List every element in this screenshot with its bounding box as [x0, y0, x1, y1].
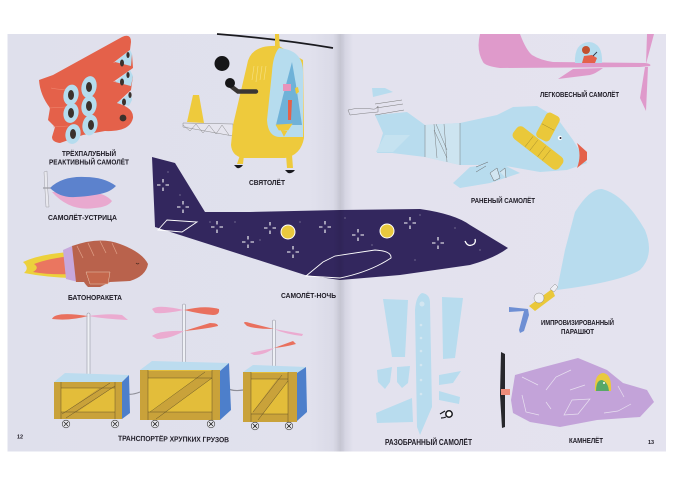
label: improvised parachute: ИМПРОВИЗИРОВАННЫЙ — [541, 318, 614, 327]
lightweight pink plane — [479, 34, 654, 111]
label: oyster plane: САМОЛЁТ-УСТРИЦА — [48, 213, 118, 222]
label: lightweight plane: ЛЕГКОВЕСНЫЙ САМОЛЁТ — [540, 90, 619, 99]
label: improvised parachute: ПАРАШЮТ — [561, 327, 594, 336]
label: helicopter: СВЯТОЛЁТ — [249, 178, 285, 187]
label: wounded plane: РАНЕНЫЙ САМОЛЁТ — [471, 196, 535, 205]
label: three-deck jet plane — [49, 149, 129, 166]
label: disassembled plane: РАЗОБРАННЫЙ САМОЛЁТ — [385, 438, 472, 447]
improvised parachute with figure — [509, 189, 649, 333]
oyster plane — [43, 171, 116, 209]
icon: loose wheel — [440, 411, 452, 418]
baguette rocket — [23, 240, 148, 287]
label: three-deck jet plane: ТРЁХПАЛУБНЫЙ — [62, 149, 116, 158]
label: night plane: САМОЛЁТ-НОЧЬ — [281, 291, 337, 300]
label: improvised parachute — [541, 318, 614, 336]
label: fragile cargo transporter: ТРАНСПОРТЁР ХРУПКИХ ГРУЗОВ — [118, 434, 229, 444]
night plane — [152, 157, 508, 280]
label: baguette rocket: БАТОНОРАКЕТА — [68, 293, 123, 302]
label: three-deck jet plane: РЕАКТИВНЫЙ САМОЛЁТ — [49, 158, 129, 166]
wounded plane — [348, 88, 587, 188]
disassembled plane — [376, 293, 463, 435]
label: stone plane: КАМНЕЛЁТ — [569, 436, 603, 445]
stone plane — [500, 352, 654, 428]
page number 13: 13 — [648, 440, 654, 446]
page number 12: 12 — [17, 434, 23, 440]
three-deck jet plane — [39, 36, 133, 145]
fragile cargo transporter — [52, 304, 307, 430]
helicopter — [183, 34, 333, 173]
